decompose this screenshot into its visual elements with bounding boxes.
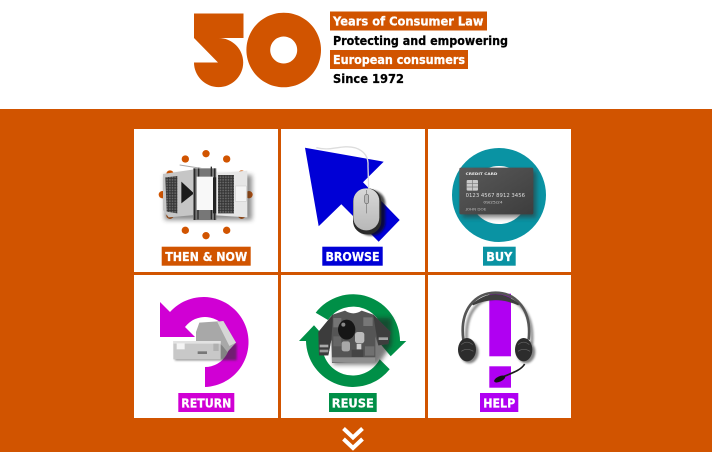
icon: recycling arrows bbox=[299, 294, 406, 387]
icon: credit card bbox=[459, 168, 536, 218]
icon: credit card: 09/25/24 bbox=[483, 201, 503, 205]
icon: double chevron down bbox=[344, 428, 362, 448]
icon: credit card: JOHN DOE bbox=[465, 208, 487, 212]
label: BUY bbox=[483, 247, 516, 266]
icon: teal ring bbox=[461, 157, 537, 233]
tile: then and now bbox=[134, 129, 278, 272]
tile: help bbox=[428, 275, 571, 418]
label: HELP: HELP bbox=[483, 395, 515, 410]
label: THEN & NOW: THEN & NOW bbox=[165, 249, 247, 264]
icon: typewriter and laptop bbox=[163, 165, 252, 220]
icon: return arrow bbox=[160, 297, 249, 387]
label: BUY: BUY bbox=[486, 249, 513, 264]
icon: credit card: 0123 4567 8912 3456 bbox=[466, 193, 525, 199]
heading: European consumers bbox=[330, 50, 468, 69]
label: REUSE: REUSE bbox=[332, 395, 374, 410]
header bbox=[194, 12, 508, 87]
icon: computer mouse bbox=[316, 147, 385, 236]
orange panel bbox=[0, 109, 712, 452]
logo: 50 bbox=[194, 13, 321, 87]
icon: parcels bbox=[173, 321, 237, 360]
text: Protecting and empowering: Protecting and empowering bbox=[333, 34, 508, 48]
icon: ring of dots bbox=[159, 150, 253, 239]
icon: headset bbox=[458, 293, 535, 384]
heading: Years of Consumer Law: Years of Consumer Law bbox=[332, 15, 484, 29]
icon: exclamation mark bbox=[489, 294, 511, 388]
icon: credit card: CREDIT CARD bbox=[466, 172, 497, 176]
icon: patterned sweater bbox=[318, 311, 392, 365]
tile: buy bbox=[428, 129, 571, 272]
text: Since 1972: Since 1972 bbox=[333, 72, 404, 86]
label: RETURN: RETURN bbox=[181, 395, 231, 410]
tile: return bbox=[134, 275, 278, 418]
label: BROWSE: BROWSE bbox=[326, 249, 380, 264]
tile: browse bbox=[281, 129, 425, 272]
icon: blue cursor bbox=[305, 148, 400, 242]
heading: European consumers: European consumers bbox=[333, 53, 465, 67]
tile: reuse bbox=[281, 275, 425, 418]
